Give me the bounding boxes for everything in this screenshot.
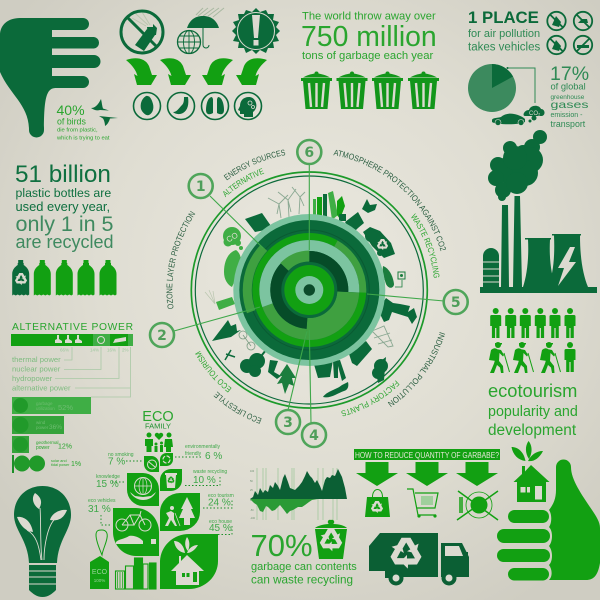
label: alternative: ALTERNATIVE [223,168,264,198]
panel: eco family [88,409,234,589]
bar percentages: 16% [107,348,116,352]
leaf: eco vehicles [113,508,159,556]
heading: eco: ECO [142,409,174,425]
icon: tree right [372,357,388,383]
text: development: development [488,422,577,439]
panel: plastic bottles [12,161,117,296]
energy bars: 52% [58,403,73,412]
text: for air pollution: for air pollution [468,28,540,40]
icon: thumbs down [0,18,101,138]
percentage labels: 15 % [96,479,119,490]
label: of birds: of birds [57,116,86,126]
panel: 70 percent recycling [250,520,357,586]
icon: solar panel [245,213,271,232]
label: gases: gases [550,99,588,111]
pie chart: 17 percent [468,64,535,112]
icon: light bulb with leaves [14,486,71,597]
energy bars: tidal power [51,463,70,467]
energy bars: wind [36,420,46,425]
icon: thumbs up [497,460,600,580]
icon: wind turbines [268,187,305,218]
percentage labels: 6 % [205,451,222,462]
energy bars: solar and [51,459,67,463]
percentage labels: eco house [209,519,232,525]
icon: shopping bag [365,490,390,517]
icon: oil rig [372,326,393,347]
icon: small plant [225,350,235,360]
numbered markers [150,140,468,447]
text: takes vehicles: takes vehicles [468,42,540,54]
icon: umbrella and globe [178,8,224,54]
bar percentages: 14% [90,348,99,352]
icon: bin and chimneys [313,360,346,381]
icon: factory [378,298,417,324]
text: only 1 in 5: only 1 in 5 [16,212,114,236]
area chart: -100 [250,517,256,520]
percentage labels: 24 % [208,498,231,508]
icon: factory with smoke [480,130,597,293]
icon: electric car [383,266,405,288]
icon: car and CO2 cloud: CO₂ [529,111,541,117]
stat: 51 billion: 51 billion [15,161,111,188]
icon: foot print [323,382,348,397]
heading bar [354,449,500,460]
icon: no spray [121,11,163,53]
heading: ALTERNATIVE POWER [12,322,133,333]
tag: eco 100 percent: ECO [92,569,108,576]
percentage labels: eco tourism [208,493,234,499]
dotted connectors [101,457,232,534]
percentage labels: 31 % [88,504,111,515]
label: of global: of global [550,82,586,92]
leaf: eco house [160,534,218,589]
marker numbers: 5 [451,295,461,311]
outer rings [191,172,427,408]
power legend [12,355,71,392]
percentage labels: 45 % [209,523,232,534]
percentage labels: environmentally [185,444,221,450]
area chart: 50 [250,480,253,483]
energy bars: utilization [36,406,55,411]
energy bars: power [36,445,50,451]
label: ozone layer protection: OZONE LAYER PROTECTION [166,210,196,309]
energy bars: 12% [58,444,72,450]
area chart: 100 [250,470,255,473]
marker numbers [157,145,461,444]
panel: garbage headline [301,10,437,62]
icon: pylons [349,341,372,366]
icon: crossed plate [457,491,498,520]
power legend: nuclear power [12,364,61,374]
marker numbers: 3 [283,415,293,431]
energy bars: 1% [71,461,81,468]
area chart: 25 [250,489,253,492]
label: eco tourism: ECO TOURISM [195,351,232,392]
text: are recycled: are recycled [16,232,114,252]
text: used every year: used every year, [16,199,110,214]
icon: recycling bin [315,520,347,559]
bar percentages: 66% [60,348,69,352]
text: tons of garbage: tons of garbage each year [302,50,433,62]
text: plastic bottles are: plastic bottles are [16,186,111,200]
panel: 17 percent text [550,63,589,129]
icon: pine tree green [277,364,296,394]
leaf: recycling [160,453,173,466]
icon: CO cloud: CO [225,231,240,244]
percentage labels: 7 % [108,456,125,468]
panel: alternative power [11,322,133,473]
ring segments [249,230,369,350]
area chart [250,468,347,520]
icon: house and leaves [345,199,377,232]
label: die from plastic: die from plastic, [57,128,98,134]
icon: people row [490,308,576,338]
icon: CO cloud [223,227,243,250]
icon: leaf arrows [126,58,267,85]
icon: prohibited vehicles [547,12,592,54]
leaf: no smoking [144,456,159,472]
label: transport: transport [550,119,586,129]
energy bars: power [36,425,49,430]
stat: 17 percent: 17% [550,63,589,85]
stat: 40 percent: 40% [56,102,85,118]
silhouettes: energy and city [205,187,417,397]
marker numbers: 4 [309,428,319,444]
energy bars: garbage [36,401,53,406]
leaf: knowledge [127,473,159,506]
icon: pine tree [212,320,241,341]
icon: green car [224,250,241,287]
percentage labels: eco vehicles [88,498,116,504]
stacked bar [11,334,133,346]
tag: eco 100 percent: 100% [94,578,105,583]
icon: organs in circles [134,92,262,120]
label: emission: emission - [550,112,583,119]
panel: reduce garbage [354,449,500,586]
icon: family figures [145,432,173,452]
panel: ecotourism [488,308,578,439]
icon: house with leaves [512,441,550,502]
icon: recycling truck [363,227,395,258]
heading text: HOW TO REDUCE QUANTITY OF GARBABE? [355,451,499,460]
icon: city buildings [313,191,346,222]
percentage labels [88,444,234,534]
icon: bottles [12,260,117,296]
text: popularity and: popularity and [488,404,578,420]
marker numbers: 1 [196,179,206,195]
text: garbage can contents: garbage can contents [251,561,357,573]
heading: 1 place: 1 PLACE [468,8,539,27]
area chart: -50 [250,509,254,512]
label: energy sources: ENERGY SOURCES [224,150,286,180]
power legend: alternative power [12,384,71,392]
icon: gardener [268,360,281,379]
percentage labels: no smoking [108,452,134,458]
tag: eco 100 percent [90,530,109,589]
text: world throw away: The world throw away over [302,10,436,22]
icon: shopping cart [407,489,438,517]
heading: family: FAMILY [145,422,171,430]
text: can waste recycling: can waste recycling [251,574,353,586]
label: industrial pollution: INDUSTRIAL POLLUTION [388,332,446,407]
leaf: waste bin [160,469,182,491]
area chart: 0 [250,499,252,502]
curved labels [166,150,446,424]
leaf: eco tourism [160,493,200,531]
bar percentages [60,348,129,352]
icon: down arrows [356,462,498,486]
label: waste recycling: WASTE RECYCLING [411,213,440,278]
icon: round tree [240,350,266,377]
icon: bike [239,331,255,350]
energy bars: geothermal [36,440,59,445]
icon: birds [91,99,118,126]
marker numbers: 2 [157,328,167,344]
icon: city skyline [116,558,156,589]
panel: birds statistic [56,99,118,142]
wheel disc [230,211,389,369]
legend connectors [55,347,130,397]
icon: hikers [489,342,576,373]
energy bars: 36% [49,424,62,431]
label: eco lifestyle: ECO LIFESTYLE [214,392,262,424]
icon: four garbage bins [301,72,439,109]
percentage labels: knowledge [96,474,120,480]
icon: warning sun [232,8,280,54]
panel: central eco wheel [148,138,469,448]
spokes [174,164,444,423]
icon: recycling truck [369,533,469,586]
percentage labels: friendly [185,451,202,457]
panel: air pollution [468,8,592,54]
icon: car and CO2 cloud [492,106,545,126]
energy bars [12,397,91,473]
percentage labels: waste recycling [193,469,227,475]
label: which is trying to eat: which is trying to eat [56,136,110,142]
label: atmosphere protection: ATMOSPHERE PROTECTION AGAINST CO2 [333,150,446,252]
percentage labels: 10 % [193,475,216,486]
power legend: hydropower [12,374,53,383]
bar percentages: 2% [122,348,129,352]
power legend: thermal power [12,355,61,364]
label: factory plants: FACTORY PLANTS [341,380,400,416]
stat: 70 percent: 70% [250,528,313,563]
stat: 750 million: 750 million [301,21,437,53]
marker numbers: 6 [304,145,314,161]
icon: spray tube [216,297,235,310]
label: greenhouse: greenhouse [550,94,585,101]
text: ecotourism: ecotourism [488,380,577,401]
